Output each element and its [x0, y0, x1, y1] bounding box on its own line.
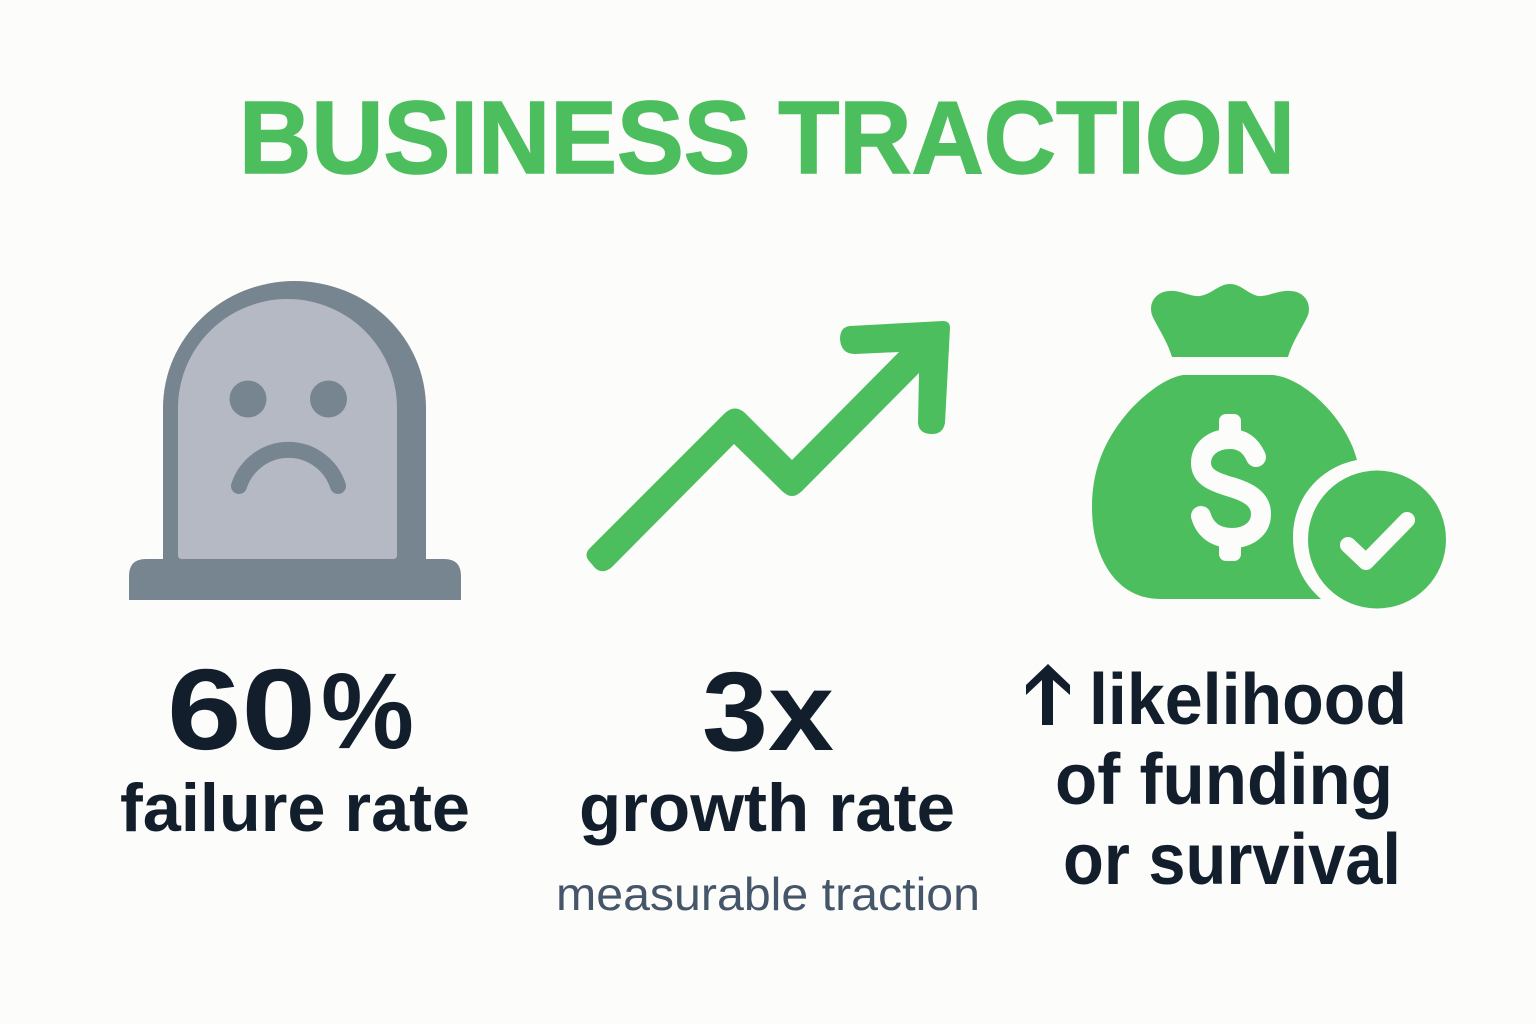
- icon: money bag with check: [1092, 284, 1446, 608]
- icon: growth arrow: [586, 321, 950, 571]
- title: BUSINESS TRACTION: [239, 80, 1295, 195]
- label: likelihood: likelihood: [1089, 660, 1407, 740]
- icon: check badge: [1308, 470, 1446, 608]
- label: or survival: or survival: [1063, 820, 1401, 900]
- stat: 60%: %: [321, 650, 414, 771]
- label: failure rate: failure rate: [120, 770, 470, 846]
- stat: 60%: [167, 646, 414, 774]
- icon: dollar sign: [1201, 414, 1261, 561]
- label: growth rate: growth rate: [579, 770, 955, 846]
- icon: up arrow: [1026, 664, 1070, 725]
- icon: tombstone: [129, 281, 461, 600]
- stat: 60%: 60: [167, 646, 316, 774]
- label: of funding: of funding: [1055, 740, 1393, 820]
- note: measurable traction: measurable traction: [556, 868, 980, 920]
- stat: 3x: 3x: [702, 649, 834, 774]
